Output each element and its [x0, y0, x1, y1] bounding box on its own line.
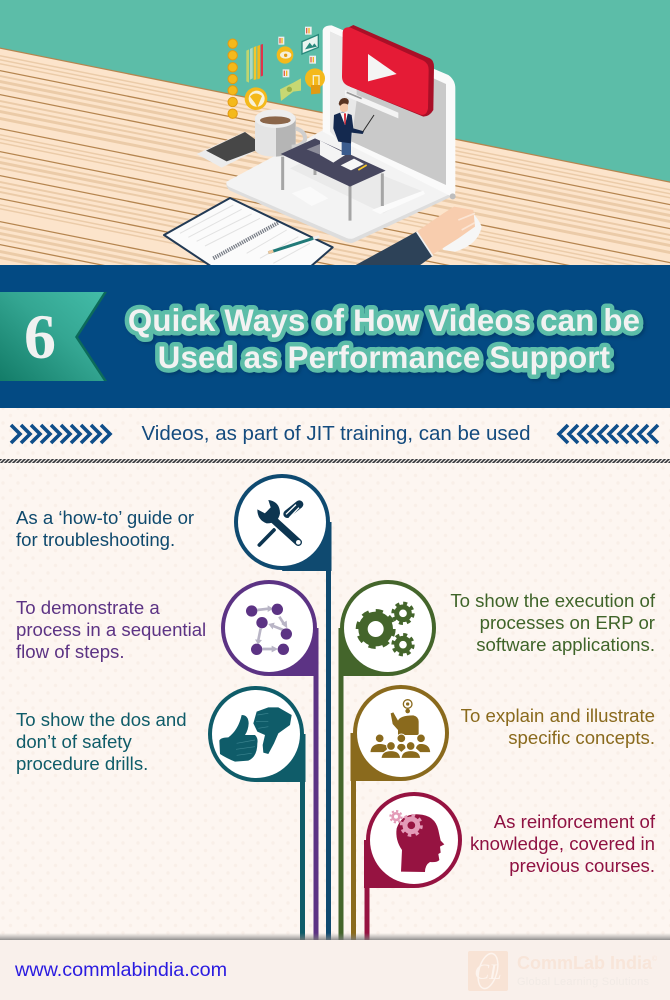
- left chevrons: [11, 425, 110, 443]
- logo: CommLab India: [517, 953, 653, 973]
- number ribbon: [0, 292, 107, 381]
- title banner: [0, 265, 670, 408]
- text: previous courses.: [509, 855, 655, 876]
- title: Used as Performance Support: [158, 340, 610, 375]
- text: for troubleshooting.: [16, 529, 175, 550]
- icon: thumbs up and down: [219, 707, 292, 762]
- hand on mouse: [356, 206, 482, 265]
- item: reinforcement: [364, 792, 656, 940]
- page background: [0, 408, 670, 940]
- play button card: [342, 25, 434, 117]
- logo: [468, 951, 658, 991]
- icon: process steps: [246, 604, 292, 655]
- text: procedure drills.: [16, 753, 148, 774]
- pin: [350, 685, 449, 940]
- desk: [281, 138, 386, 221]
- item: ERP execution: [338, 580, 656, 940]
- text: To explain and illustrate: [461, 705, 655, 726]
- text: To show the execution of: [450, 590, 656, 611]
- caption bar under video: [345, 90, 398, 118]
- text: software applications.: [476, 634, 655, 655]
- footer: [0, 933, 670, 1000]
- icon: wrench and screwdriver: [257, 500, 301, 545]
- text: specific concepts.: [508, 727, 655, 748]
- text: To demonstrate a: [16, 597, 160, 618]
- logo: CL: [475, 959, 501, 984]
- subheading row: [11, 422, 658, 445]
- right chevrons: [559, 425, 658, 443]
- wooden desk: [0, 48, 670, 265]
- website link: www.commlabindia.com: [14, 959, 227, 981]
- pin: [338, 580, 436, 940]
- logo: Global Learning Solutions: [517, 976, 650, 988]
- text: As reinforcement of: [494, 811, 656, 832]
- item: safety drills: [16, 686, 306, 940]
- text: flow of steps.: [16, 641, 125, 662]
- text: knowledge, covered in: [470, 833, 655, 854]
- smartphone: [197, 132, 258, 168]
- text: As a ‘how-to’ guide or: [16, 507, 194, 528]
- text: don’t of safety: [16, 731, 132, 752]
- presenter: [333, 98, 374, 155]
- laptop base: [226, 130, 455, 243]
- pin: [221, 580, 318, 940]
- laptop screen: [323, 25, 456, 199]
- coffee mug: [255, 109, 305, 157]
- notebook: [164, 198, 333, 270]
- logo: ©: [652, 955, 658, 963]
- item: how-to guide: [16, 474, 332, 940]
- number ribbon: 6: [24, 301, 56, 372]
- hero illustration: [0, 0, 670, 265]
- pin: [364, 792, 462, 940]
- pin: [208, 686, 306, 940]
- text: To show the dos and: [16, 709, 187, 730]
- icon: head with gears: [390, 811, 444, 872]
- subheading text: Videos, as part of JIT training, can be used: [142, 422, 530, 445]
- floating icons: [228, 27, 325, 118]
- icon: presenter and audience: [370, 700, 431, 758]
- title: Quick Ways of How Videos can be: [128, 303, 640, 338]
- text: process in a sequential: [16, 619, 206, 640]
- icon: gears: [358, 603, 413, 655]
- pin: [234, 474, 332, 940]
- title: [128, 303, 640, 375]
- item: concepts: [350, 685, 655, 940]
- item: sequential process: [16, 580, 318, 940]
- text: processes on ERP or: [480, 612, 655, 633]
